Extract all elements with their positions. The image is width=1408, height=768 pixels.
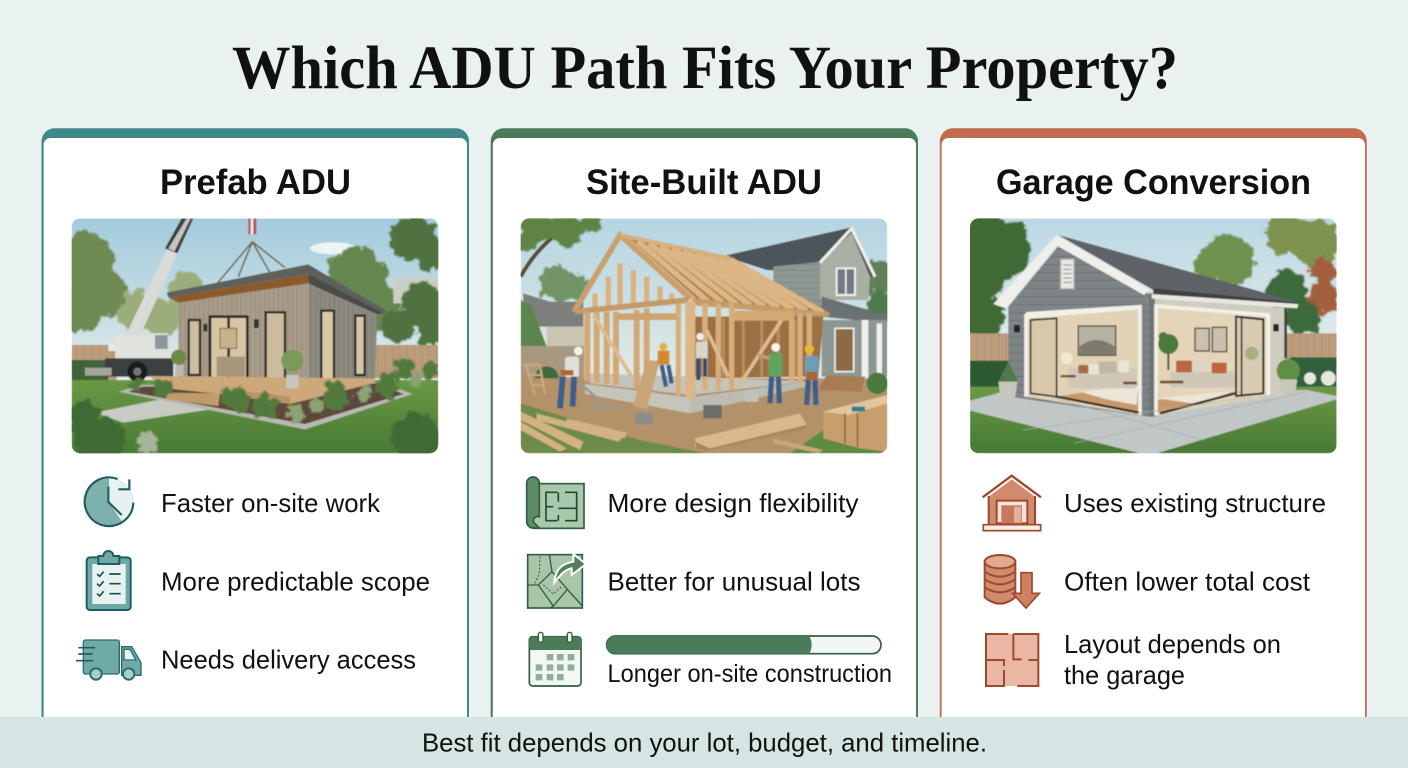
icon: house with garage xyxy=(983,476,1041,531)
benefit: layout depends on the garage xyxy=(986,629,1281,690)
text: Often lower total cost xyxy=(1064,566,1311,596)
icon: delivery truck xyxy=(76,640,141,680)
benefit: unusual lots xyxy=(528,554,860,608)
panel frame xyxy=(42,128,469,730)
icon: checklist clipboard xyxy=(87,551,131,610)
workers xyxy=(560,333,818,408)
benefit: lower cost xyxy=(985,555,1311,608)
benefit: predictable scope xyxy=(87,551,430,610)
progress bar xyxy=(606,636,881,654)
heading: Garage Conversion xyxy=(996,163,1311,202)
illustration: crane lifting prefab unit xyxy=(72,218,438,454)
text: More predictable scope xyxy=(161,566,430,596)
text: Uses existing structure xyxy=(1064,488,1326,518)
text: More design flexibility xyxy=(608,488,858,518)
panel frame xyxy=(940,128,1367,730)
text: Needs delivery access xyxy=(161,644,416,674)
icon: lot map with arrow xyxy=(528,554,586,608)
text xyxy=(1064,629,1281,690)
benefit: delivery access xyxy=(76,640,416,680)
icon: coins and down arrow xyxy=(985,555,1039,608)
panel: Prefab ADU xyxy=(42,128,469,730)
benefit: existing structure xyxy=(983,476,1326,531)
text: Longer on-site construction xyxy=(608,660,892,688)
panel: Garage Conversion xyxy=(940,128,1367,730)
text: the garage xyxy=(1064,660,1185,690)
panel frame xyxy=(491,128,918,730)
benefit: longer construction xyxy=(529,632,892,688)
text: Layout depends on xyxy=(1064,629,1281,659)
icon: blueprint roll xyxy=(527,477,584,528)
illustration: converted garage xyxy=(957,212,1341,453)
panel: Site-Built ADU xyxy=(491,128,918,730)
text: Better for unusual lots xyxy=(608,566,860,596)
benefit: design flexibility xyxy=(527,477,858,528)
icon: clock xyxy=(85,477,133,527)
footer band xyxy=(0,717,1408,768)
benefit: faster on-site work xyxy=(85,477,381,527)
title: Which ADU Path Fits Your Property? xyxy=(232,35,1178,102)
icon: calendar xyxy=(529,632,581,686)
icon: floor plan xyxy=(986,634,1038,686)
illustration: timber frame under construction xyxy=(513,210,898,453)
heading: Prefab ADU xyxy=(160,163,351,202)
footer text: Best fit depends on your lot, budget, and timeline. xyxy=(422,728,987,758)
text: Faster on-site work xyxy=(161,488,381,518)
heading: Site-Built ADU xyxy=(586,163,822,202)
